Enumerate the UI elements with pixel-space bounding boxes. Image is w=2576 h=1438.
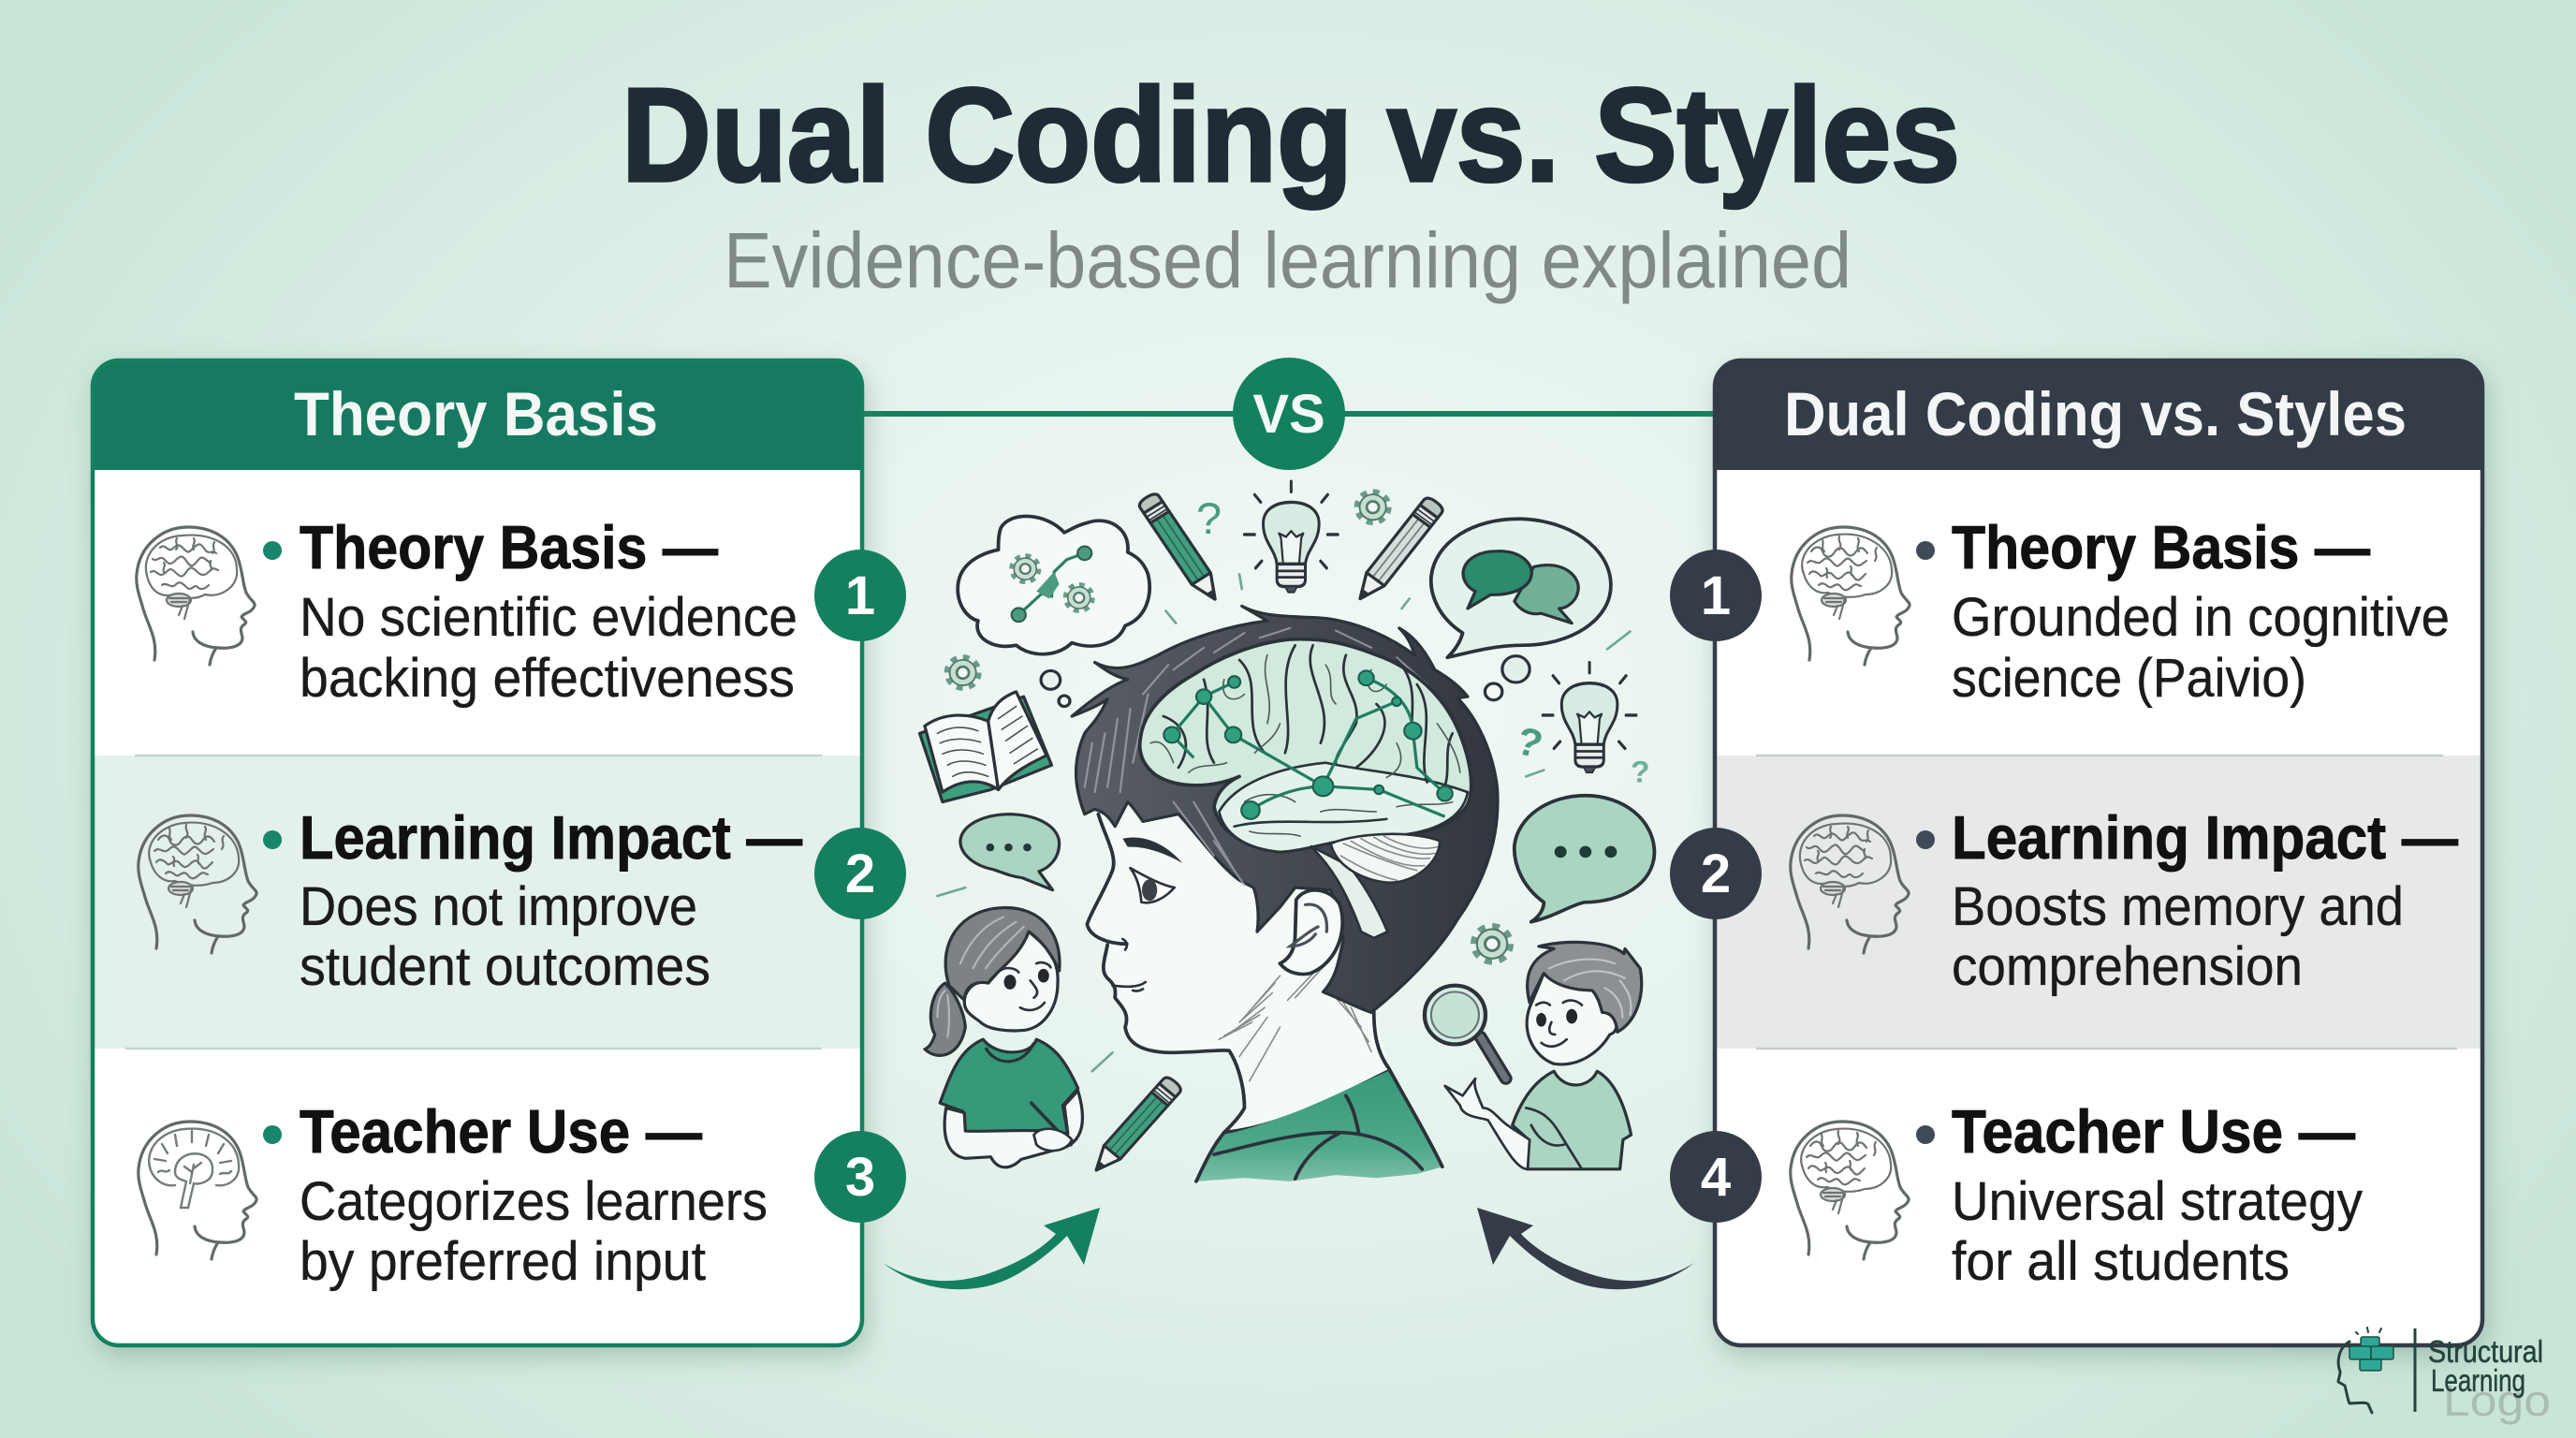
left header label: Theory Basis <box>294 379 658 448</box>
logo: Learning <box>2431 1363 2525 1398</box>
boy profile: ear <box>1280 890 1342 975</box>
left row 1: Theory Basis — <box>300 513 718 581</box>
connector line with VS badge <box>861 358 1715 470</box>
icon: grey pencil <box>1352 495 1445 605</box>
boy profile: cerebellum and brain stem <box>1310 834 1440 938</box>
girl figure <box>925 908 1082 1167</box>
logo <box>2338 1328 2551 1425</box>
left row 2 <box>139 803 802 997</box>
subtitle: Evidence-based learning explained <box>724 216 1852 304</box>
right badge 1 <box>1670 550 1762 641</box>
right badge 2 <box>1670 828 1762 919</box>
central illustration <box>920 481 1654 1181</box>
right row 3 <box>1791 1097 2363 1292</box>
left row 1: No scientific evidence <box>300 587 798 648</box>
left row 2: student outcomes <box>300 936 710 997</box>
boy profile: face and neck <box>1087 783 1389 1130</box>
right row 3: for all students <box>1952 1231 2290 1292</box>
icon: question mark: ? <box>1196 495 1222 544</box>
right row 3: Universal strategy <box>1952 1171 2363 1232</box>
connector line with VS badge: VS <box>1252 384 1325 445</box>
small thought bubbles <box>1041 656 1530 707</box>
left header bar <box>91 359 864 470</box>
right row 1 <box>1792 513 2450 709</box>
logo head outline <box>2338 1342 2372 1413</box>
neck hatching <box>1219 959 1371 1081</box>
icon: head with brain <box>137 527 255 665</box>
icon: green pencil lower <box>1088 1075 1183 1177</box>
left row 1 <box>137 513 798 709</box>
icon: head with brain <box>139 815 256 953</box>
right header label: Dual Coding vs. Styles <box>1784 379 2407 448</box>
logo: Logo <box>2443 1376 2551 1425</box>
icon: green pencil <box>1137 492 1224 605</box>
right row 2: Boosts memory and <box>1952 876 2404 937</box>
right badge 4 <box>1670 1131 1762 1223</box>
icon: small question marks: ? <box>1512 719 1547 768</box>
right row 2: Learning Impact — <box>1952 803 2458 872</box>
right row 1: Theory Basis — <box>1952 513 2370 581</box>
icon: open book <box>920 692 1051 802</box>
decorative dashes <box>937 574 1630 1071</box>
left badge 3: 3 <box>845 1147 875 1208</box>
boy profile: hair <box>1072 606 1498 1012</box>
logo: Structural <box>2428 1334 2543 1369</box>
right row 2 <box>1791 803 2458 997</box>
right row 1: Grounded in cognitive <box>1952 587 2450 648</box>
boy figure <box>1445 942 1642 1169</box>
left row 3: Categorizes learners <box>300 1171 768 1232</box>
right badge 4: 4 <box>1701 1147 1731 1208</box>
speech bubble small left <box>960 814 1060 890</box>
icon: head with brain <box>1791 815 1909 953</box>
left badge 1: 1 <box>845 565 875 626</box>
right row 2: comprehension <box>1952 936 2303 997</box>
icon: head with brain <box>1791 1122 1909 1259</box>
boy profile: face outline <box>1087 814 1442 1167</box>
speech bubble large right <box>1515 796 1654 922</box>
left row 2: Does not improve <box>300 876 697 937</box>
left badge 2: 2 <box>845 844 875 904</box>
icon: small question marks <box>1512 719 1650 789</box>
boy profile: nose and mouth <box>1113 939 1146 991</box>
title: Dual Coding vs. Styles <box>622 61 1960 210</box>
right header bar <box>1713 359 2484 470</box>
icon: head with brain <box>1792 527 1910 665</box>
left row 3: by preferred input <box>300 1231 706 1292</box>
right row 1: science (Paivio) <box>1952 648 2306 709</box>
panel: theory basis (left) <box>91 359 906 1347</box>
left row 1: backing effectiveness <box>300 648 795 709</box>
icon: gear right <box>1474 927 1510 961</box>
icon: light bulb top <box>1244 481 1338 593</box>
icon: light bulb right <box>1543 663 1636 772</box>
boy profile: shirt <box>1196 1069 1442 1181</box>
logo brick cross <box>2349 1337 2393 1371</box>
left row 2 background <box>91 756 864 1049</box>
right badge 1: 1 <box>1701 565 1731 626</box>
right row 2 background <box>1713 756 2484 1049</box>
left row 3: Teacher Use — <box>300 1097 702 1166</box>
arrow: right curved arrow <box>1477 1208 1694 1289</box>
boy profile: eye and eyebrow <box>1122 837 1182 902</box>
thought cloud <box>958 516 1149 654</box>
arrow: left curved arrow <box>883 1208 1100 1289</box>
icon: gear left <box>947 658 978 687</box>
left badge 2 <box>814 828 906 919</box>
right badge 2: 2 <box>1701 844 1731 904</box>
boy profile: brain <box>1140 639 1471 852</box>
icon: small question marks: ? <box>1631 755 1650 789</box>
left row 2: Learning Impact — <box>300 803 802 872</box>
icon: magnifying glass <box>1425 986 1506 1078</box>
icon: gear top <box>1357 492 1388 521</box>
icon: head with brain <box>139 1122 256 1259</box>
left row 3 <box>139 1097 768 1292</box>
left badge 3 <box>814 1131 906 1223</box>
speech bubble with two chat icons <box>1431 519 1611 657</box>
panel: dual coding vs styles (right) <box>1670 359 2484 1347</box>
right row 3: Teacher Use — <box>1952 1097 2355 1166</box>
left badge 1 <box>814 550 906 641</box>
